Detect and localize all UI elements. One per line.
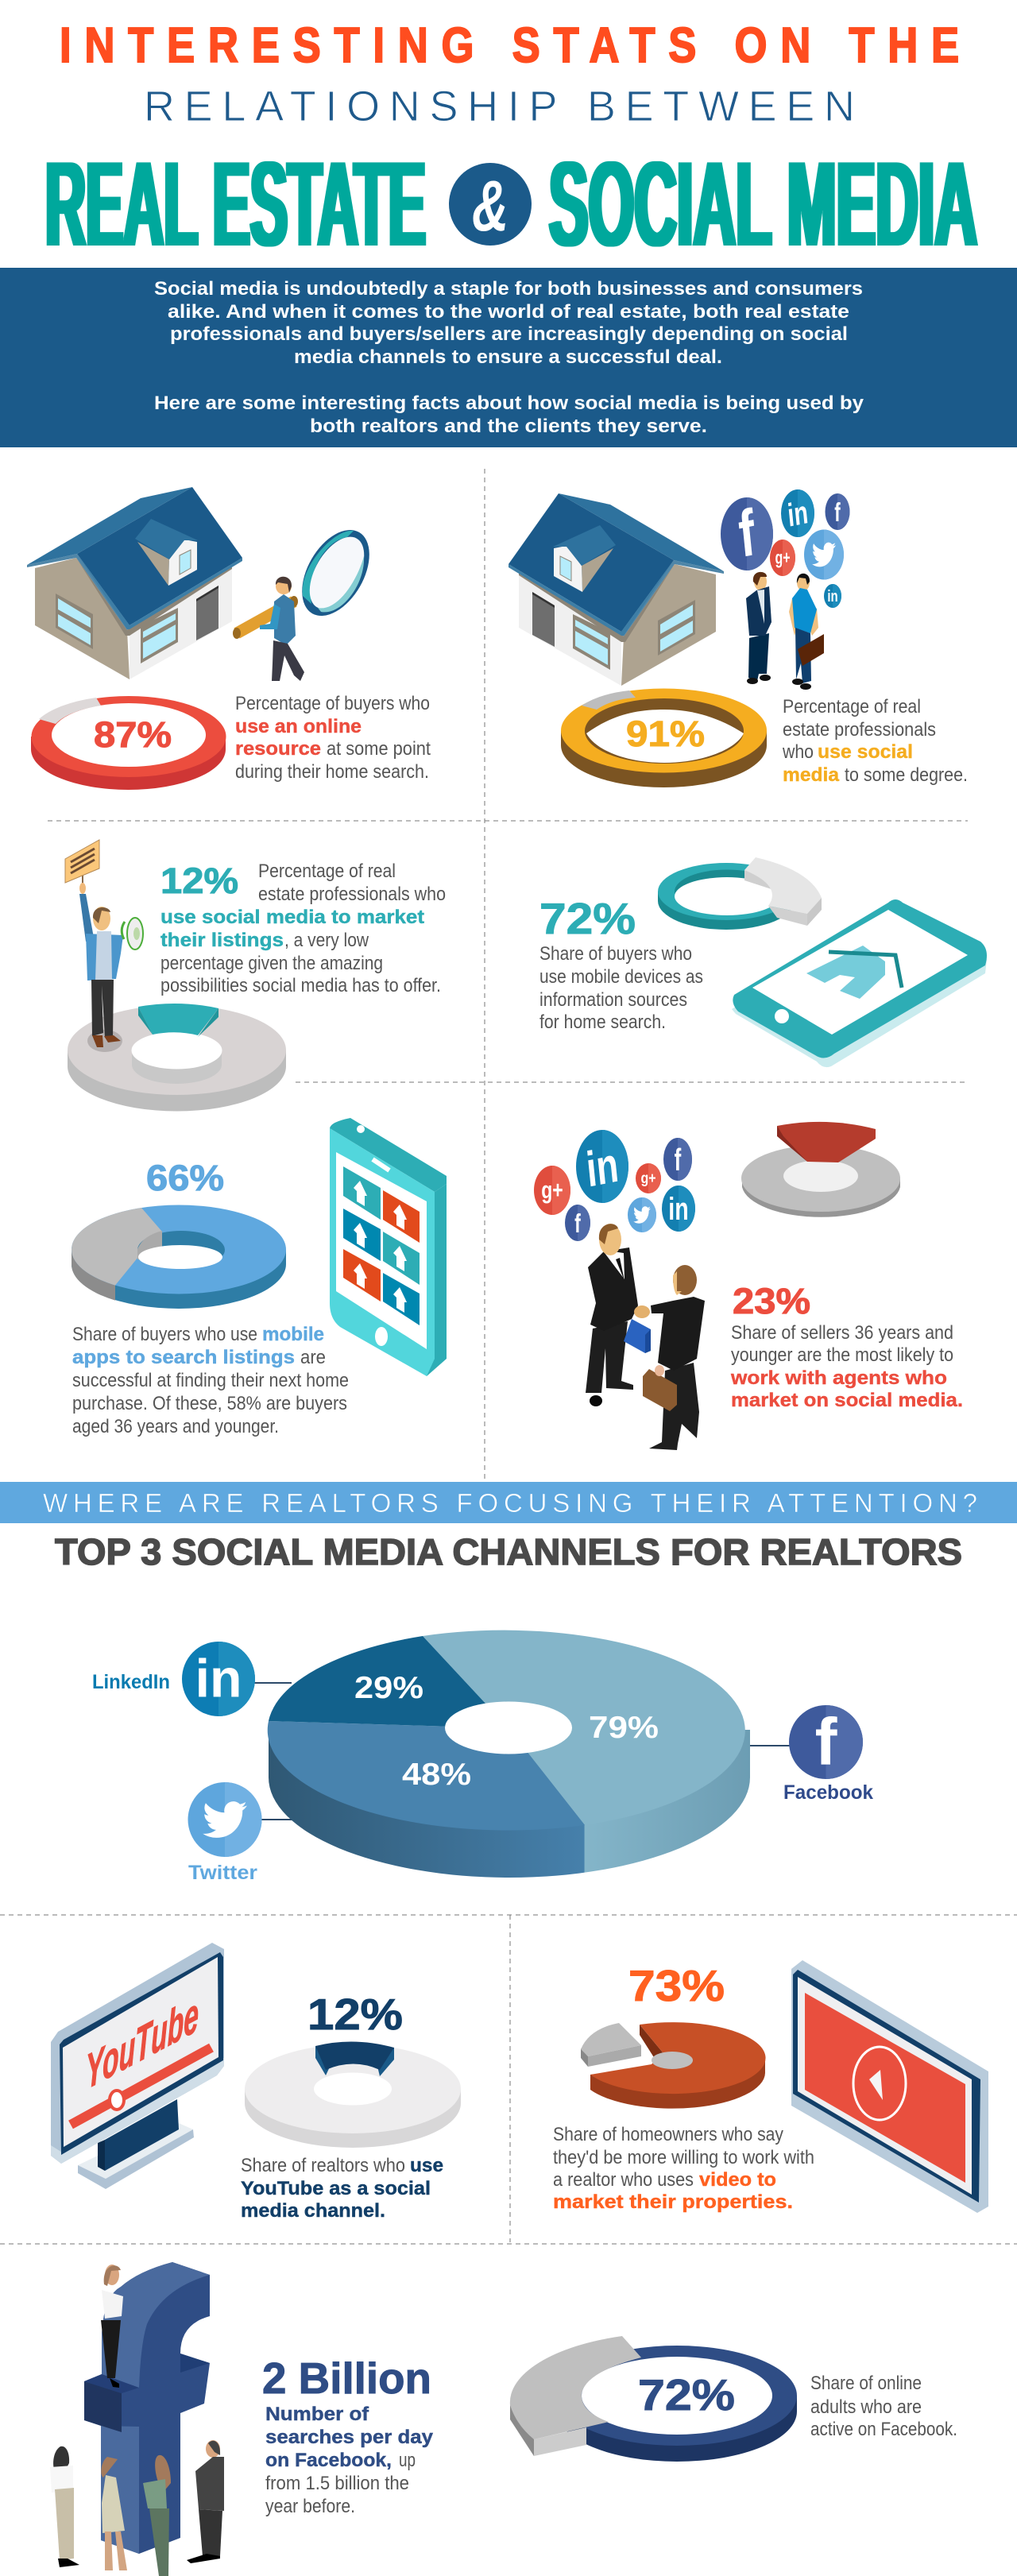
icon: YouTube monitor bbox=[51, 1943, 224, 2189]
panel: 66% mobile apps bbox=[72, 1118, 447, 1437]
text block: Facebook searches: year before. bbox=[265, 2496, 355, 2517]
text block: 66% description: apps to search listings bbox=[72, 1347, 295, 1368]
icon: house mirrored bbox=[508, 493, 724, 686]
text block: 72% description bbox=[539, 943, 703, 1033]
text block: 87% description: during their home search. bbox=[235, 761, 429, 783]
text block: Facebook searches bbox=[265, 2404, 434, 2517]
text block: Facebook searches: Number of bbox=[265, 2404, 369, 2425]
panel: intro band: professionals and buyers/sellers are increasingly depending on social bbox=[170, 323, 848, 345]
text block: active adults: adults who are bbox=[810, 2396, 922, 2418]
panel: intro band bbox=[0, 268, 1017, 447]
text block: 66% description: Share of buyers who use bbox=[72, 1324, 257, 1345]
stat: 12%: 12% bbox=[307, 1990, 403, 2039]
panel: 91% use social media bbox=[508, 489, 968, 787]
title bbox=[45, 18, 977, 272]
icon: Twitter: Twitter bbox=[188, 1862, 257, 1884]
chart: 72% navy ring bbox=[510, 2336, 797, 2462]
text block: 66% description: aged 36 years and younger. bbox=[72, 1416, 279, 1437]
icon: Facebook: f bbox=[815, 1704, 838, 1778]
text block: Facebook searches: from 1.5 billion the bbox=[265, 2473, 409, 2494]
chart: 23% donut bbox=[741, 1122, 900, 1217]
text block: 23% description: market on social media. bbox=[731, 1390, 963, 1411]
text block: 66% description: purchase. Of these, 58% are buyers bbox=[72, 1393, 347, 1414]
panel: 87% online resource bbox=[27, 487, 431, 790]
text block: 91% description bbox=[782, 696, 968, 786]
chart: 12% donut bbox=[68, 1004, 286, 1111]
chart: 73% pie bbox=[581, 2022, 766, 2109]
icon: social bubbles: g+ bbox=[775, 548, 791, 568]
chart: top channels pie: 29% bbox=[354, 1671, 423, 1705]
text block: 66% description: mobile bbox=[262, 1324, 324, 1345]
title: REAL ESTATE bbox=[45, 137, 426, 272]
icon: tablet phone with tiles bbox=[330, 1118, 447, 1376]
text block: 72% description: for home search. bbox=[539, 1011, 666, 1033]
panel: intro band: Here are some interesting facts about how social media is being used by bbox=[154, 393, 864, 414]
text block: video description bbox=[553, 2124, 814, 2213]
icon: social bubbles cluster bbox=[534, 1130, 695, 1241]
text block: 23% description: younger are the most likely to bbox=[731, 1344, 953, 1366]
chart: top channels pie: 79% bbox=[589, 1711, 659, 1745]
chart: top channels pie bbox=[254, 1630, 790, 1878]
text block: video description: market their properties. bbox=[553, 2191, 793, 2213]
icon: man with sign and megaphone bbox=[65, 840, 143, 1047]
text block: 72% description: Share of buyers who bbox=[539, 943, 692, 965]
chart: 87% ring: 87% bbox=[94, 714, 172, 755]
icon: social bubbles bbox=[721, 489, 850, 608]
text block: 12% description: , a very low bbox=[284, 930, 369, 951]
section banner bbox=[0, 1482, 1017, 1523]
panel: intro band: Social media is undoubtedly a staple for both businesses and consumers bbox=[154, 278, 863, 300]
icon: two businessmen handshake bbox=[586, 1224, 705, 1450]
text block: 87% description: Percentage of buyers who bbox=[235, 693, 430, 714]
chart: 91% ring bbox=[561, 688, 767, 787]
section banner: WHERE ARE REALTORS FOCUSING THEIR ATTENTION? bbox=[43, 1488, 977, 1518]
text block: 87% description: resource bbox=[235, 738, 321, 760]
icon: YouTube monitor: YouTube bbox=[86, 1986, 199, 2101]
stat: 73%: 73% bbox=[628, 1961, 725, 2010]
text block: 91% description: who bbox=[782, 741, 814, 763]
heading: top 3 channels: TOP 3 SOCIAL MEDIA CHANNELS FOR REALTORS bbox=[55, 1531, 962, 1572]
icon: LinkedIn bbox=[92, 1642, 255, 1716]
chart: 72% teal ring bbox=[658, 857, 822, 930]
panel: 73% video bbox=[553, 1960, 988, 2213]
icon: Facebook: Facebook bbox=[783, 1781, 873, 1804]
icon: LinkedIn: in bbox=[195, 1649, 242, 1709]
text block: YouTube description bbox=[241, 2155, 443, 2222]
text block: 12% description: Percentage of real bbox=[258, 861, 396, 882]
icon: smartphone with house bbox=[732, 899, 987, 1067]
stat: 23%: 23% bbox=[733, 1281, 810, 1321]
icon: two professionals bbox=[746, 572, 824, 690]
icon: social bubbles cluster: f bbox=[574, 1209, 581, 1239]
text block: video description: video to bbox=[699, 2169, 776, 2191]
panel: 12% YouTube bbox=[51, 1943, 461, 2222]
text block: active adults bbox=[810, 2373, 957, 2440]
title: INTERESTING STATS ON THE bbox=[60, 18, 959, 73]
chart: top channels pie: 48% bbox=[402, 1758, 471, 1792]
text block: active adults: active on Facebook. bbox=[810, 2419, 957, 2440]
panel: 72% mobile devices bbox=[539, 857, 987, 1067]
text block: 23% description: Share of sellers 36 years and bbox=[731, 1322, 953, 1344]
chart: 87% ring bbox=[31, 696, 226, 790]
icon: social bubbles cluster: f bbox=[675, 1143, 682, 1178]
text block: 91% description: Percentage of real bbox=[783, 696, 921, 717]
icon: giant Facebook f with people bbox=[50, 2262, 224, 2576]
text block: Facebook searches: on Facebook, bbox=[265, 2450, 392, 2471]
icon: Facebook bbox=[783, 1704, 873, 1804]
text block: Facebook searches: up bbox=[399, 2450, 416, 2471]
icon: social bubbles: in bbox=[827, 587, 838, 605]
text block: 87% description: at some point bbox=[327, 738, 431, 760]
text block: Facebook searches: searches per day bbox=[265, 2427, 434, 2448]
icon: social bubbles cluster: in bbox=[584, 1136, 621, 1197]
text block: 12% description: their listings bbox=[160, 930, 284, 951]
icon: social bubbles cluster: in bbox=[668, 1193, 689, 1227]
text block: 12% description: estate professionals who bbox=[258, 884, 446, 905]
chart: 72% navy ring: 72% bbox=[638, 2370, 735, 2419]
panel: 12% market listings bbox=[65, 840, 446, 1111]
icon: social bubbles: in bbox=[786, 494, 810, 534]
panel: intro band: alike. And when it comes to the world of real estate, both real estate bbox=[168, 301, 849, 323]
text block: YouTube description: Share of realtors who bbox=[241, 2155, 405, 2176]
chart: 66% donut bbox=[72, 1205, 286, 1309]
stat: 2 Billion: 2 Billion bbox=[262, 2354, 431, 2403]
stat: 72%: 72% bbox=[539, 894, 636, 943]
text block: 12% description: use social media to market bbox=[160, 907, 424, 928]
panel: 2 Billion searches bbox=[50, 2262, 434, 2576]
text block: 66% description: are bbox=[300, 1347, 326, 1368]
text block: YouTube description: use bbox=[410, 2155, 443, 2176]
text block: active adults: Share of online bbox=[810, 2373, 922, 2394]
text block: 23% description bbox=[730, 1322, 963, 1411]
icon: social bubbles cluster: g+ bbox=[541, 1176, 563, 1204]
panel: 72% active on Facebook bbox=[510, 2336, 957, 2462]
icon: social bubbles cluster: g+ bbox=[640, 1170, 656, 1186]
text block: video description: a realtor who uses bbox=[553, 2169, 694, 2191]
icon: Twitter bbox=[188, 1782, 262, 1884]
text block: 87% description: use an online bbox=[235, 716, 362, 737]
text block: YouTube description: YouTube as a social bbox=[241, 2178, 431, 2199]
chart: 12% white donut bbox=[245, 2041, 461, 2148]
text block: 12% description: possibilities social media has to offer. bbox=[160, 975, 441, 996]
text block: 91% description: use social bbox=[818, 741, 913, 763]
panel: 23% sellers bbox=[534, 1122, 963, 1450]
panel: intro band: both realtors and the clients they serve. bbox=[310, 416, 707, 437]
text block: 66% description bbox=[72, 1324, 349, 1437]
text block: 91% description: to some degree. bbox=[845, 764, 968, 786]
text block: 12% description: percentage given the amazing bbox=[160, 953, 383, 974]
text block: video description: Share of homeowners who say bbox=[553, 2124, 783, 2145]
text block: 12% description bbox=[160, 861, 446, 996]
icon: LinkedIn: LinkedIn bbox=[92, 1671, 170, 1693]
icon: social bubbles: f bbox=[834, 497, 841, 527]
text block: 23% description: work with agents who bbox=[730, 1367, 947, 1389]
text block: 91% description: estate professionals bbox=[783, 719, 936, 741]
text block: 72% description: use mobile devices as bbox=[539, 966, 703, 988]
text block: 87% description bbox=[235, 693, 431, 783]
icon: video tablet bbox=[791, 1960, 988, 2213]
panel: intro band: media channels to ensure a successful deal. bbox=[294, 346, 722, 368]
chart: 91% ring: 91% bbox=[626, 714, 705, 754]
stat: 12%: 12% bbox=[160, 861, 238, 901]
text block: 66% description: successful at finding their next home bbox=[72, 1370, 349, 1391]
title: RELATIONSHIP BETWEEN bbox=[144, 83, 855, 130]
icon: person with magnifier bbox=[233, 518, 383, 681]
stat: 66%: 66% bbox=[146, 1158, 224, 1198]
text block: YouTube description: media channel. bbox=[241, 2200, 385, 2222]
title: & bbox=[472, 167, 508, 246]
icon: house bbox=[27, 487, 242, 679]
text block: video description: they'd be more willing to work with bbox=[553, 2147, 814, 2168]
text block: 72% description: information sources bbox=[539, 989, 687, 1011]
text block: 91% description: media bbox=[783, 764, 840, 786]
icon: social bubbles: f bbox=[736, 496, 759, 571]
